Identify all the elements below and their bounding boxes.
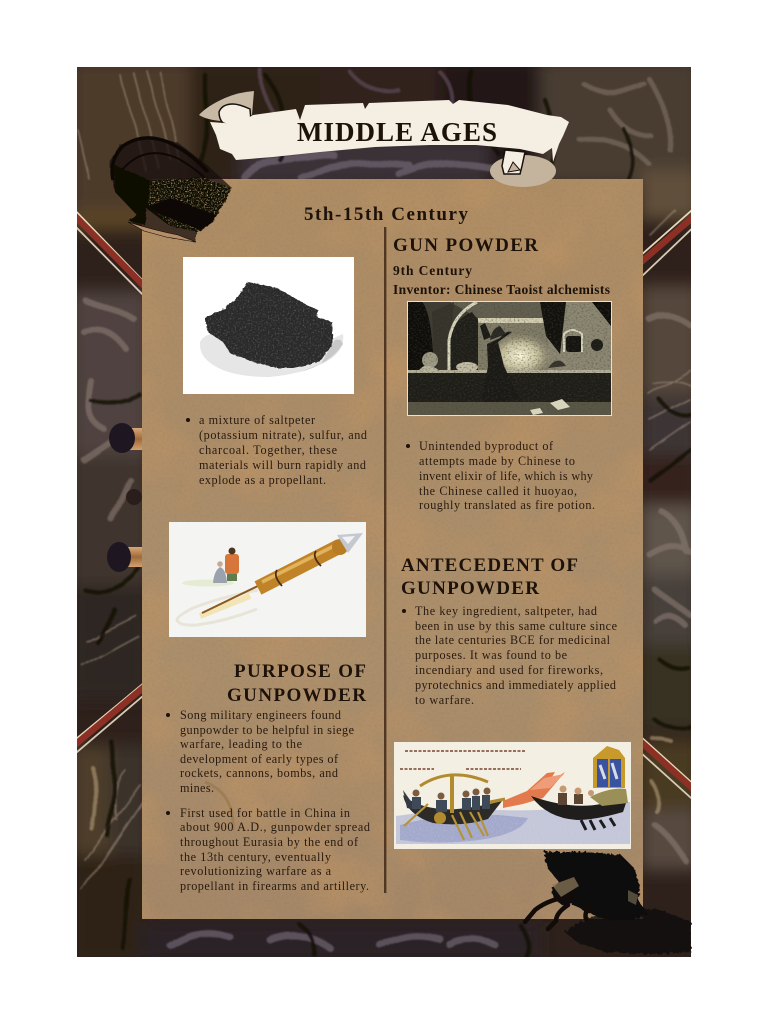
bullet xyxy=(166,713,170,717)
horse legs xyxy=(525,896,590,929)
rocket exhaust xyxy=(177,590,258,625)
flames xyxy=(503,772,565,808)
image: alchemist workshop xyxy=(407,301,612,416)
horse body and rider xyxy=(545,852,648,920)
shadow on ground xyxy=(565,908,691,954)
rocket tube xyxy=(258,546,340,588)
text: gunpowder composition xyxy=(186,413,367,487)
text: first used for battle: about 900 A.D., gunpowder spread xyxy=(180,820,370,834)
text: first used for battle: throughout Eurasia by the end of xyxy=(180,835,359,849)
text: song military engineers: mines. xyxy=(180,781,214,795)
text: key ingredient: purposes. It was found to be xyxy=(415,648,567,662)
text: song military engineers: development of early types of xyxy=(180,752,339,766)
text: gunpowder composition: explode as a propellant. xyxy=(199,473,326,487)
text: gunpowder composition: materials will burn rapidly and xyxy=(199,458,366,472)
faint ghost stroke xyxy=(205,782,233,830)
manuscript script lines xyxy=(400,751,525,769)
title: MIDDLE AGES xyxy=(297,117,497,147)
left ship xyxy=(403,795,502,824)
copper cylinders xyxy=(107,423,144,572)
text: key ingredient: the late centuries BCE for medicinal xyxy=(415,633,611,647)
text: first used for battle xyxy=(166,806,370,893)
heading: purpose of gunpowder: PURPOSE OF xyxy=(234,661,366,682)
heading: gun powder: GUN POWDER xyxy=(393,235,538,256)
scroll banner xyxy=(199,91,569,187)
text: key ingredient: The key ingredient, saltpeter, had xyxy=(415,604,597,618)
text: song military engineers: gunpowder to be helpful in siege xyxy=(180,723,354,737)
text: unintended byproduct xyxy=(406,439,595,512)
panel: parchment xyxy=(142,179,643,919)
text: unintended byproduct: the Chinese called it huoyao, xyxy=(419,484,577,498)
scroll end top left xyxy=(199,91,254,133)
heading: antecedent of gunpowder: GUNPOWDER xyxy=(401,578,539,599)
heading: purpose of gunpowder: GUNPOWDER xyxy=(227,685,366,706)
column divider xyxy=(384,227,386,893)
text: first used for battle: the 13th century, eventually xyxy=(180,850,332,864)
subtitle: 5th-15th Century xyxy=(304,204,468,225)
scroll end bottom right xyxy=(490,150,556,187)
text: unintended byproduct: roughly translated as fire potion. xyxy=(419,498,595,512)
bullet xyxy=(402,609,406,613)
text: key ingredient: been in use by this same culture since xyxy=(415,619,617,633)
text: song military engineers: Song military engineers found xyxy=(180,708,341,722)
text: song military engineers xyxy=(166,708,354,795)
painted forms xyxy=(82,300,690,860)
inventor line: Inventor: Chinese Taoist alchemists xyxy=(393,282,610,297)
heading: antecedent of gunpowder: ANTECEDENT OF xyxy=(401,555,578,576)
bullet xyxy=(186,418,190,422)
text: key ingredient xyxy=(402,604,617,707)
image: fire lance rocket xyxy=(169,522,366,637)
rocket shaft xyxy=(202,542,349,613)
text: gunpowder composition: (potassium nitrate), sulfur, and xyxy=(199,428,367,442)
text: first used for battle: propellant in firearms and artillery. xyxy=(180,879,369,893)
text: gunpowder composition: a mixture of saltpeter xyxy=(199,413,315,427)
red stripes xyxy=(70,203,700,806)
text: unintended byproduct: invent elixir of life, which is why xyxy=(419,469,594,483)
text: unintended byproduct: attempts made by Chinese to xyxy=(419,454,575,468)
image: greek fire manuscript xyxy=(394,742,631,849)
right ship xyxy=(531,796,627,820)
text: song military engineers: warfare, leading to the xyxy=(180,737,302,751)
icon: knight helmet xyxy=(109,138,234,242)
text: key ingredient: incendiary and used for fireworks, xyxy=(415,663,603,677)
text: first used for battle: revolutionizing warfare as a xyxy=(180,864,332,878)
banner ribbon xyxy=(210,100,569,162)
figures xyxy=(225,554,239,574)
artwork background xyxy=(70,60,700,965)
bullet xyxy=(166,811,170,815)
sea xyxy=(396,802,630,844)
text: key ingredient: to warfare. xyxy=(415,693,474,707)
text: gunpowder composition: charcoal. Together, these xyxy=(199,443,337,457)
heading: antecedent of gunpowder xyxy=(401,555,578,599)
bullet xyxy=(406,444,410,448)
heading: purpose of gunpowder xyxy=(227,661,366,706)
arrow head xyxy=(337,533,363,553)
text: first used for battle: First used for battle in China in xyxy=(180,806,350,820)
icon: horse and rider silhouette xyxy=(525,852,691,954)
image: gunpowder pile xyxy=(183,257,354,394)
date: 9th century: 9th Century xyxy=(393,263,472,278)
church shrine xyxy=(593,746,625,788)
text: unintended byproduct: Unintended byproduct of xyxy=(419,439,554,453)
text: song military engineers: rockets, cannons, bombs, and xyxy=(180,766,338,780)
text: key ingredient: pyrotechnics and immediately applied xyxy=(415,678,616,692)
